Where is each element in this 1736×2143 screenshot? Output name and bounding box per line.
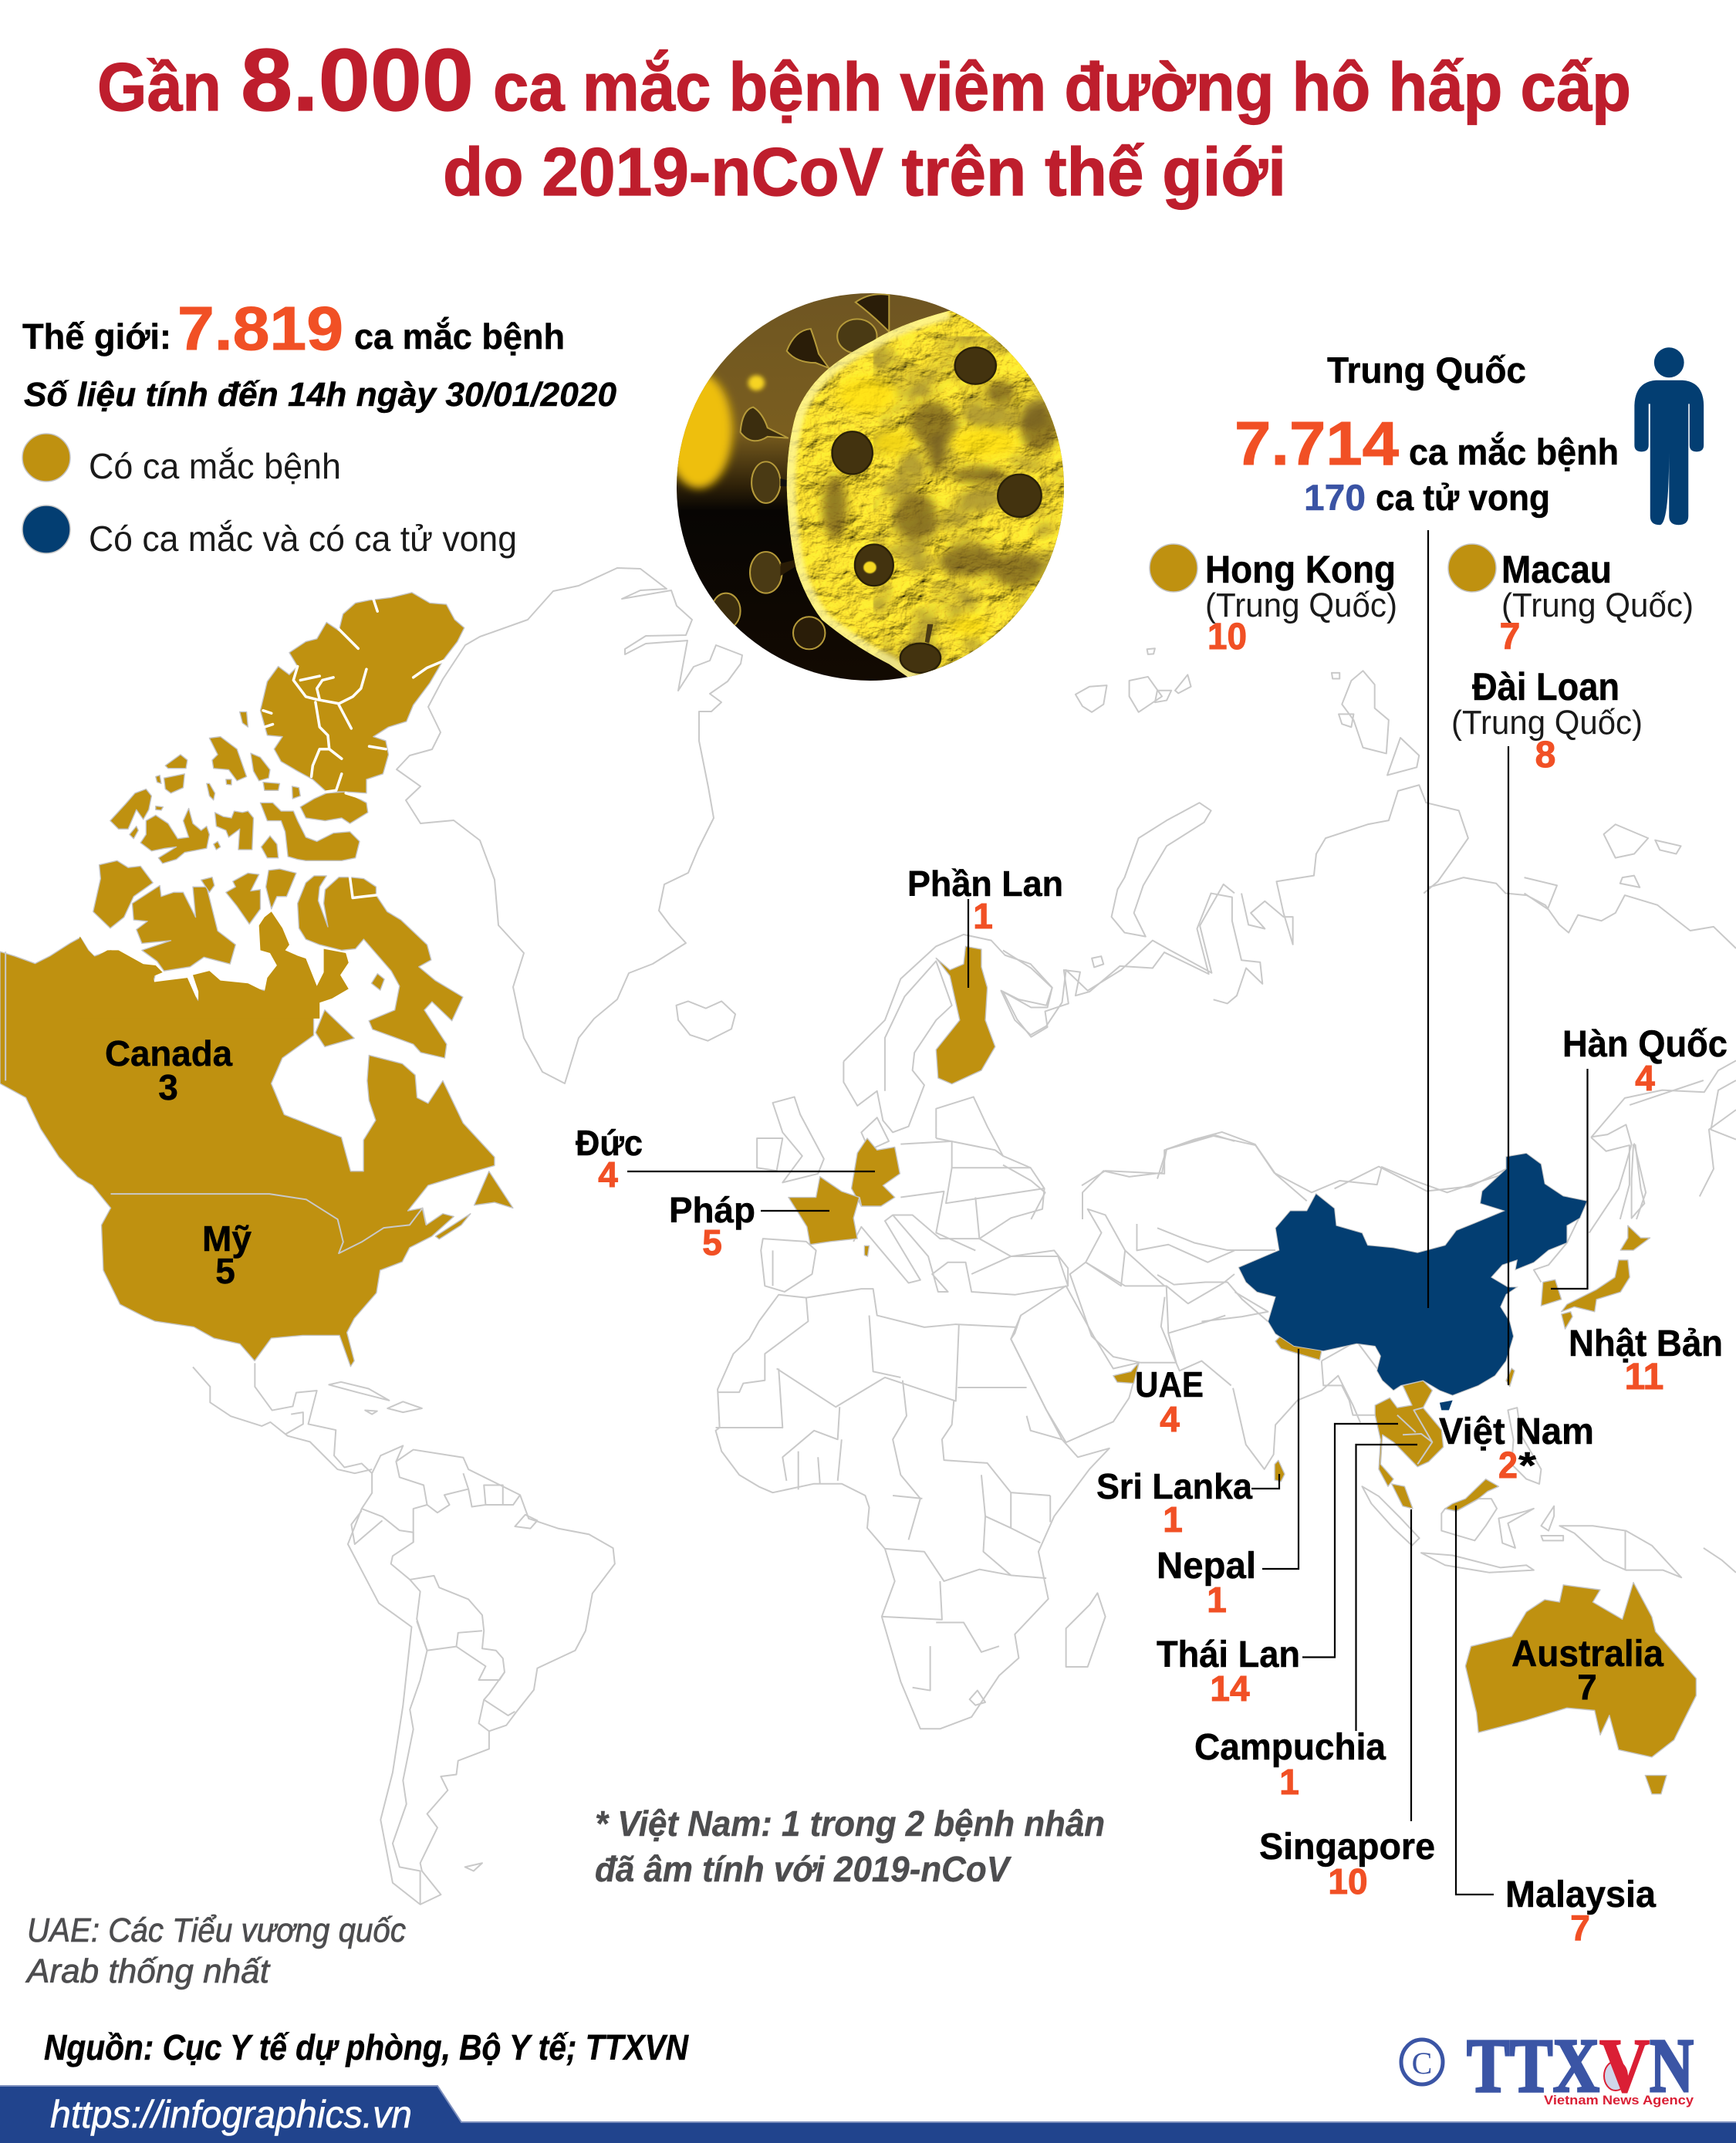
- Cambodia label: 1: [1279, 1762, 1299, 1802]
- dark spikes on surface: [833, 347, 1042, 673]
- Europe, Africa and Middle East outlines: [677, 884, 1234, 1729]
- USA label: Mỹ: [202, 1219, 252, 1259]
- TTXVN logo: [1401, 2023, 1694, 2108]
- Americas outlines: [193, 1363, 615, 1905]
- Asia and Oceania outlines: [1157, 1080, 1736, 1577]
- TTXVN logo: V: [1599, 2023, 1650, 2108]
- world map base outlines: [193, 568, 1736, 1905]
- Nepal label: [1157, 1349, 1299, 1620]
- Australia label: Australia: [1511, 1634, 1663, 1675]
- Japan label: [1569, 1323, 1723, 1398]
- China totals block: ca tử vong: [1376, 477, 1550, 518]
- Greenland outline: [397, 568, 742, 1083]
- Macau label: [1448, 544, 1694, 657]
- title: Gần: [97, 49, 221, 125]
- Vietnam footnote: [595, 1803, 1105, 1889]
- title: ca mắc bệnh viêm đường hô hấp cấp: [493, 49, 1631, 125]
- USA label: 5: [215, 1251, 235, 1291]
- Taiwan label: 8: [1535, 735, 1555, 776]
- Cambodia label: Campuchia: [1194, 1727, 1386, 1768]
- Hong Kong label: 10: [1207, 617, 1247, 657]
- Japan label: 11: [1625, 1357, 1663, 1398]
- Vietnam label: *: [1518, 1445, 1536, 1486]
- Thailand label: 14: [1210, 1668, 1250, 1709]
- Malaysia label: Malaysia: [1505, 1874, 1656, 1915]
- Germany label: 4: [598, 1154, 618, 1195]
- Australia label: [1511, 1634, 1663, 1707]
- Japan label: Nhật Bản: [1569, 1323, 1723, 1364]
- Vietnam label: 2: [1498, 1445, 1518, 1486]
- TTXVN logo: N: [1650, 2023, 1694, 2108]
- Nepal label: Nepal: [1157, 1546, 1256, 1587]
- title: 8.000: [241, 32, 474, 130]
- virus illustration: [677, 293, 1064, 681]
- Svalbard and Arctic islands, Russia coast: [1003, 648, 1736, 1219]
- Cambodia label: [1194, 1445, 1417, 1802]
- TTXVN logo: TTX: [1467, 2023, 1599, 2108]
- Canada label: [105, 1033, 232, 1107]
- Vietnam footnote: đã âm tính với 2019-nCoV: [595, 1849, 1012, 1889]
- legend: Có ca mắc bệnh: [89, 446, 341, 486]
- Malaysia label: [1456, 1506, 1656, 1948]
- UAE note: Arab thống nhất: [25, 1952, 271, 1990]
- Singapore label: 10: [1328, 1861, 1368, 1901]
- France label: [669, 1190, 829, 1262]
- Taiwan label: (Trung Quốc): [1451, 704, 1643, 742]
- Malaysia label: 7: [1570, 1908, 1590, 1948]
- world totals block: 7.819: [177, 294, 343, 363]
- icon: person: [1634, 347, 1704, 525]
- South Korea label: [1551, 1024, 1728, 1289]
- Asia and Australia gold countries: [1275, 1225, 1696, 1794]
- China in navy: [1238, 1153, 1587, 1410]
- Macau label: (Trung Quốc): [1501, 586, 1694, 624]
- Germany label: Đức: [576, 1123, 643, 1163]
- Sri Lanka label: [1096, 1466, 1279, 1540]
- TTXVN logo: C: [1412, 2046, 1432, 2080]
- Finland label: [907, 864, 1063, 988]
- Canadian Arctic archipelago: [77, 593, 464, 1058]
- footer band: https://infographics.vn: [50, 2093, 412, 2136]
- Australia label: 7: [1577, 1667, 1597, 1707]
- TTXVN logo: Vietnam News Agency: [1544, 2093, 1694, 2108]
- China totals block: ca mắc bệnh: [1409, 431, 1619, 472]
- outlined spike pods: [711, 294, 889, 649]
- North America: Canada and USA mainland: [0, 938, 513, 1367]
- UAE label: [1135, 1364, 1204, 1439]
- world totals block: ca mắc bệnh: [354, 316, 565, 357]
- France label: Pháp: [669, 1190, 755, 1230]
- Finland label: 1: [973, 896, 993, 936]
- Africa coastline and borders: [716, 1289, 1109, 1729]
- legend: Có ca mắc và có ca tử vong: [89, 519, 517, 559]
- title: [97, 32, 1631, 210]
- China totals block: Trung Quốc: [1327, 350, 1526, 390]
- UAE label: UAE: [1135, 1364, 1204, 1404]
- Hong Kong label: Hong Kong: [1205, 548, 1396, 591]
- Taiwan label: [1451, 665, 1643, 1385]
- world totals block: Thế giới:: [22, 316, 171, 357]
- China totals block: [1234, 350, 1619, 1308]
- South Korea label: Hàn Quốc: [1562, 1024, 1728, 1065]
- Sri Lanka label: Sri Lanka: [1096, 1466, 1252, 1506]
- Singapore label: Singapore: [1259, 1827, 1435, 1868]
- South Korea label: 4: [1635, 1058, 1655, 1098]
- footer band: [0, 2086, 1736, 2143]
- Singapore label: [1259, 1509, 1435, 1901]
- world totals block: [22, 294, 617, 414]
- Canada label: 3: [158, 1067, 178, 1107]
- virus body: [787, 310, 1064, 678]
- UAE label: 4: [1160, 1399, 1180, 1439]
- Canada label: Canada: [105, 1033, 232, 1073]
- Finland label: Phần Lan: [907, 864, 1063, 904]
- China totals block: 170: [1304, 477, 1366, 518]
- Thailand label: Thái Lan: [1157, 1634, 1300, 1675]
- Nepal label: 1: [1207, 1580, 1227, 1620]
- Taiwan label: Đài Loan: [1472, 665, 1619, 708]
- Vietnam footnote: * Việt Nam: 1 trong 2 bệnh nhân: [595, 1803, 1105, 1844]
- UAE note: [25, 1911, 406, 1990]
- Thailand label: [1157, 1424, 1398, 1709]
- Europe: Finland, Germany, France, UAE: [789, 946, 1139, 1384]
- affected countries on map: [0, 593, 1696, 1794]
- legend: [22, 434, 517, 559]
- source: Nguồn: Cục Y tế dự phòng, Bộ Y tế; TTXVN: [44, 2027, 689, 2067]
- Vietnam label: Việt Nam: [1439, 1411, 1594, 1452]
- Hong Kong label: (Trung Quốc): [1205, 586, 1397, 624]
- Canada fjords: [263, 595, 444, 898]
- world totals block: Số liệu tính đến 14h ngày 30/01/2020: [24, 376, 617, 414]
- title: do 2019-nCoV trên thế giới: [443, 134, 1286, 210]
- Macau label: Macau: [1501, 548, 1612, 591]
- USA label: [202, 1219, 252, 1291]
- Hong Kong label: [1150, 544, 1397, 657]
- China totals block: 7.714: [1234, 409, 1400, 478]
- Sri Lanka label: 1: [1163, 1499, 1183, 1540]
- country borders over gold areas: [5, 952, 1432, 1464]
- France label: 5: [702, 1222, 722, 1262]
- UAE note: UAE: Các Tiểu vương quốc: [27, 1911, 406, 1949]
- Macau label: 7: [1500, 617, 1520, 657]
- Germany label: [576, 1123, 875, 1195]
- Vietnam label: [1439, 1411, 1594, 1486]
- brown surface shading: [822, 380, 1059, 587]
